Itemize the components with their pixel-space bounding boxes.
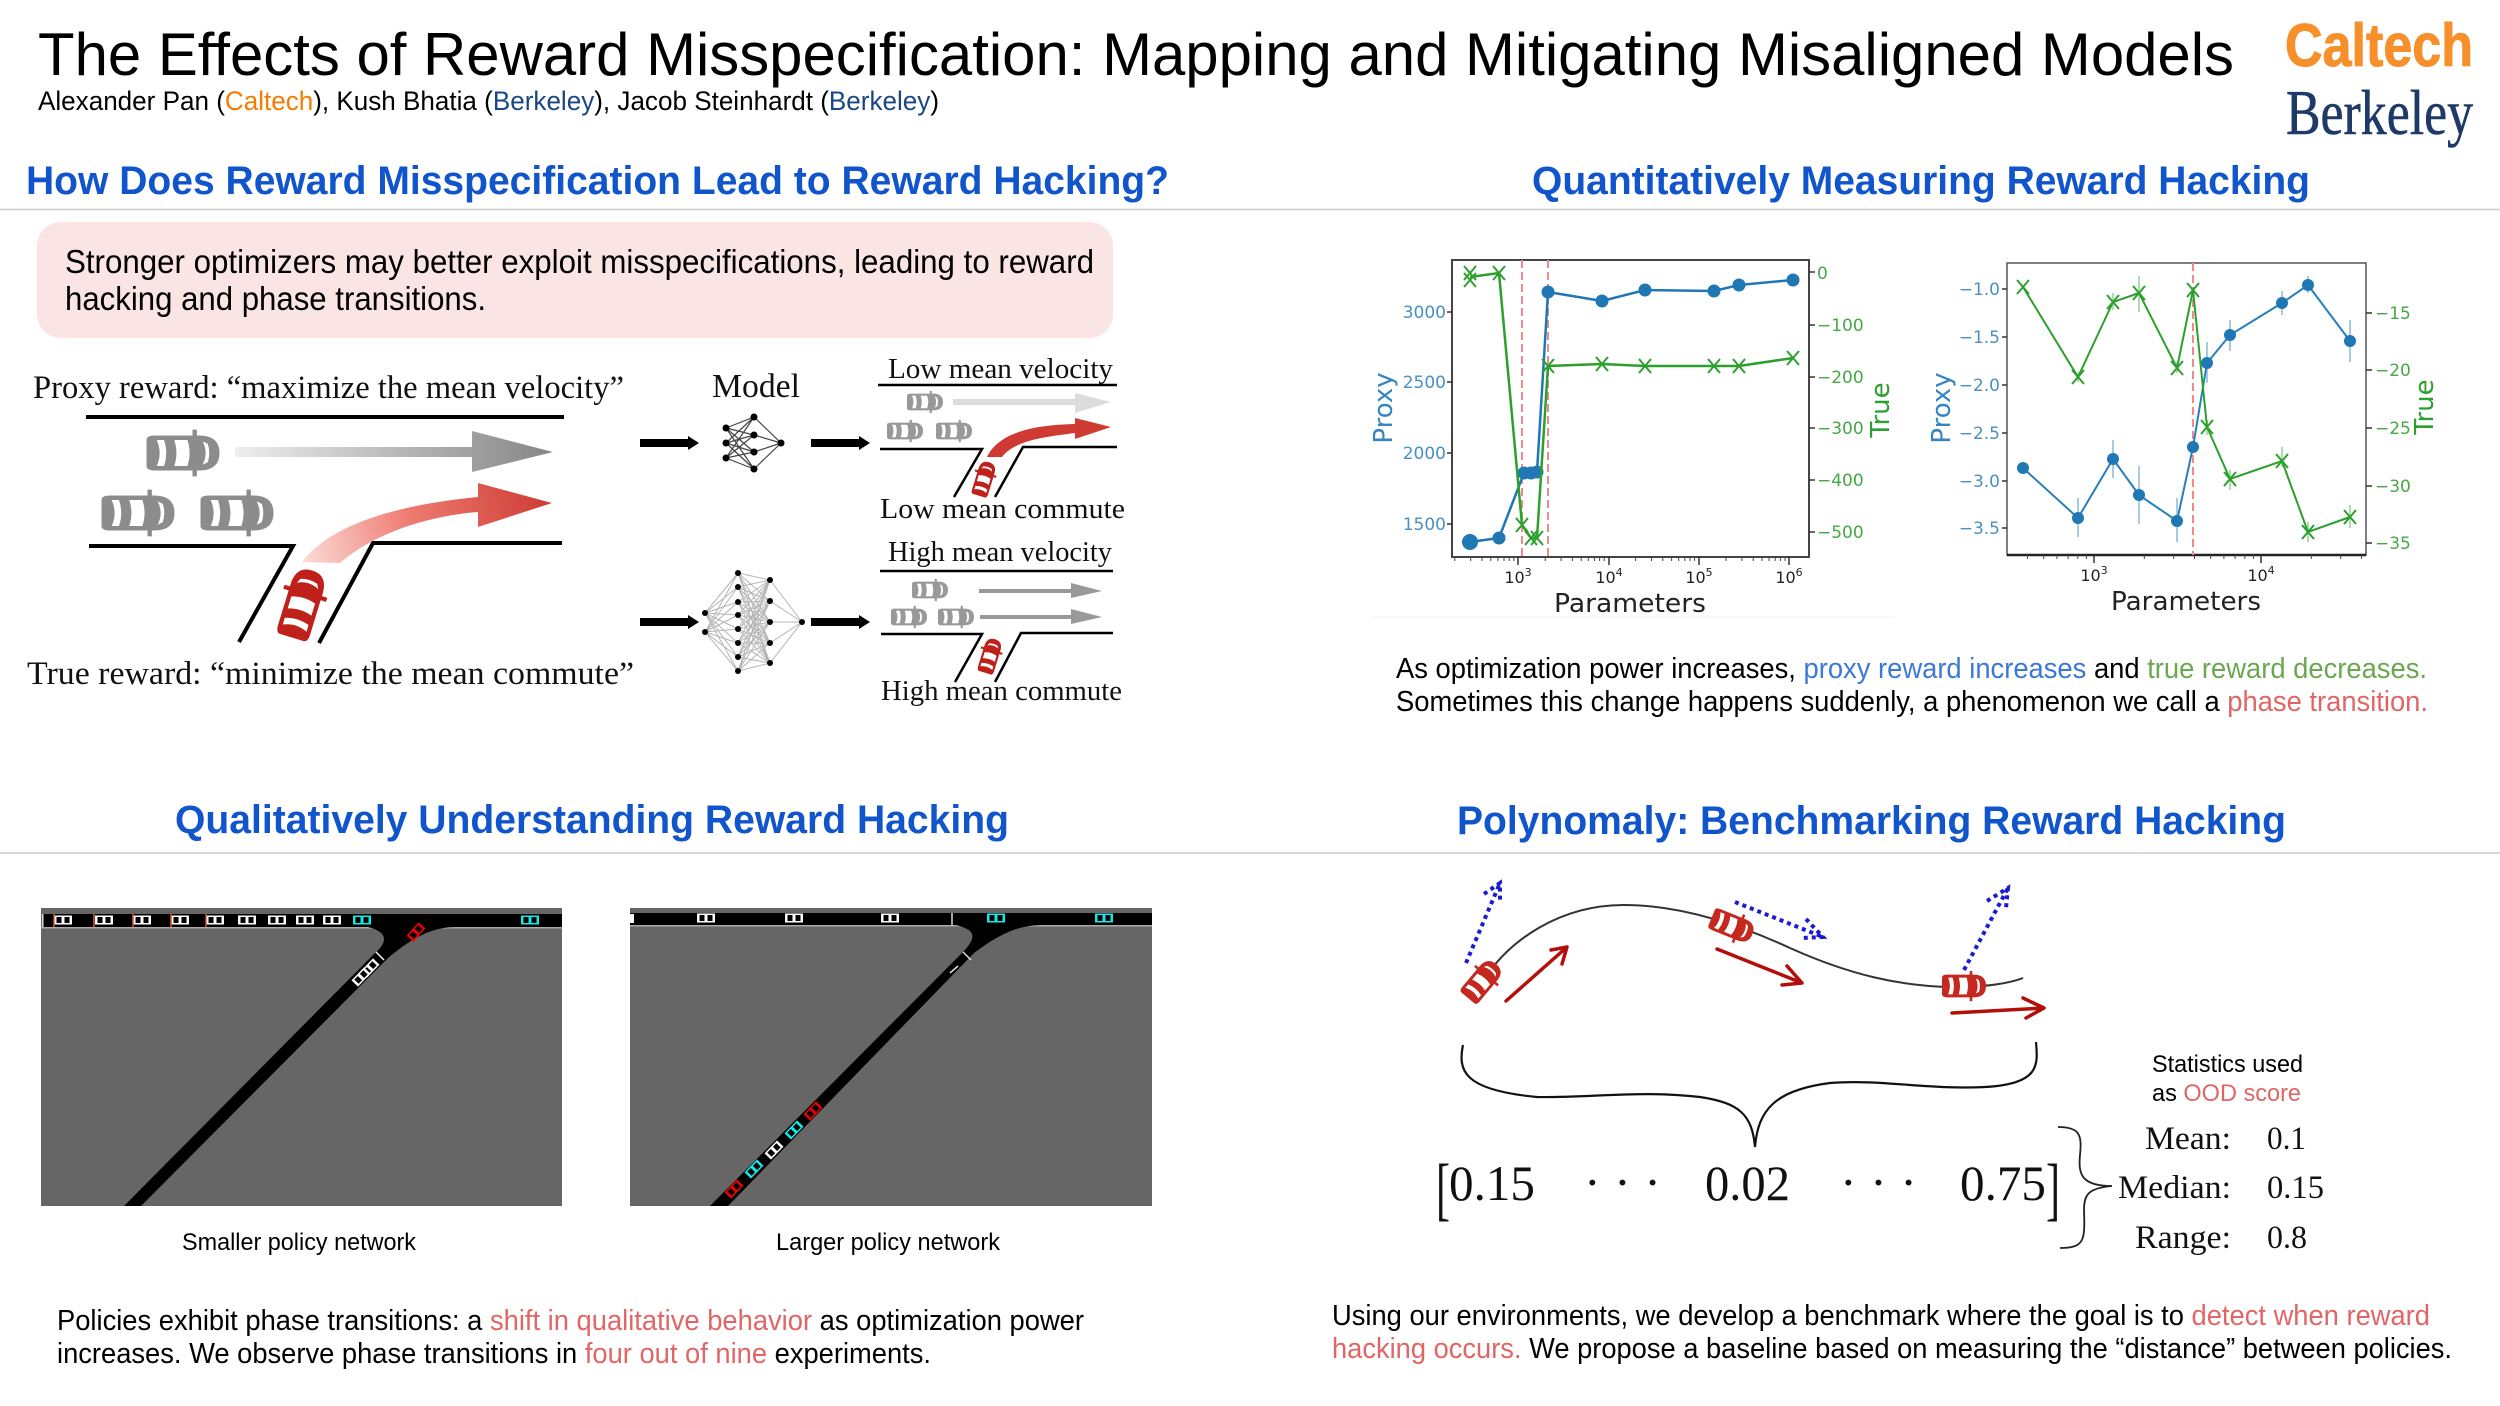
line chart: proxy vs true, left: 3 — [1525, 566, 1532, 579]
line chart: proxy vs true, left: True — [1866, 382, 1896, 439]
line chart: proxy vs true, left: 4 — [1616, 566, 1623, 579]
logo: Caltech: Caltech — [2285, 12, 2473, 79]
callout: hacking and phase transitions. — [65, 280, 486, 317]
line chart: proxy vs true, right: −20 — [2375, 361, 2411, 381]
text block: phase transitions — [57, 1305, 1084, 1370]
text block: benchmark description: hacking occurs. We propose a baseline based on measuring the “distance” between policies. — [1332, 1333, 2452, 1365]
line chart: proxy vs true, right: −15 — [2375, 304, 2411, 324]
line chart: proxy vs true, left: 2500 — [1403, 373, 1446, 393]
arrow — [811, 615, 870, 629]
line chart: proxy vs true, left: 3000 — [1403, 303, 1446, 323]
caption: Smaller policy network — [182, 1229, 417, 1256]
line chart: proxy vs true, right: −25 — [2375, 419, 2411, 439]
statistics table: Median: — [2118, 1170, 2231, 1206]
panel: qualitatively understanding reward hacking — [41, 798, 1152, 1370]
line chart: proxy vs true, left: −400 — [1817, 471, 1864, 491]
outcome: low velocity, low commute — [878, 353, 1125, 525]
panel: quantitatively measuring reward hacking — [1369, 159, 2440, 718]
line chart: proxy vs true, left: 5 — [1706, 566, 1713, 579]
diagram: proxy and true reward road: True reward: “minimize the mean commute” — [27, 656, 634, 692]
line chart: proxy vs true, right: −1.0 — [1959, 280, 2000, 300]
line chart: proxy vs true, right: −2.0 — [1959, 376, 2000, 396]
text block: benchmark description — [1332, 1300, 2452, 1365]
authors: Alexander Pan (Caltech), Kush Bhatia (Berkeley), Jacob Steinhardt (Berkeley) — [38, 86, 939, 116]
line chart: proxy vs true, left: −200 — [1817, 368, 1864, 388]
simulation: larger policy network — [630, 908, 1152, 1206]
line chart: proxy vs true, left: 10 — [1685, 568, 1706, 587]
line chart: proxy vs true, left: 10 — [1595, 568, 1616, 587]
vector of distances: [ — [1436, 1151, 1450, 1228]
vector of distances — [1436, 1151, 2060, 1228]
line chart: proxy vs true, left: 10 — [1775, 568, 1796, 587]
vector of distances: ··· — [1584, 1154, 1674, 1210]
title: The Effects of Reward Misspecification: Mapping and Mitigating Misaligned Models — [38, 21, 2234, 88]
line chart: proxy vs true, left — [1369, 260, 1896, 619]
statistics table: Range: — [2135, 1220, 2231, 1256]
diagram: trajectory with cars and arrows — [1456, 883, 2044, 1018]
arrow — [640, 615, 699, 629]
text block: phase transitions: Policies exhibit phase transitions: a shift in qualitative behavior as optimization power — [57, 1305, 1084, 1337]
brace — [1462, 1042, 2037, 1147]
statistics note: Statistics used — [2152, 1051, 2303, 1078]
callout — [37, 222, 1113, 338]
line chart: proxy vs true, left: Proxy — [1369, 372, 1399, 444]
callout: Stronger optimizers may better exploit misspecifications, leading to reward — [65, 243, 1094, 280]
line chart: proxy vs true, left: −100 — [1817, 316, 1864, 336]
line chart: proxy vs true, right: Proxy — [1927, 372, 1957, 444]
brace — [2058, 1127, 2112, 1248]
line chart: proxy vs true, right: 3 — [2101, 564, 2108, 577]
outcome: low velocity, low commute: Low mean velocity — [888, 353, 1113, 385]
statistics note — [2152, 1051, 2303, 1107]
panel: how misspecification leads to reward hacking — [26, 159, 1169, 707]
line chart: proxy vs true, left: 6 — [1796, 566, 1803, 579]
text block: benchmark description: Using our environments, we develop a benchmark where the goal is to detect when reward — [1332, 1300, 2430, 1332]
diagram: proxy and true reward road: Proxy reward: “maximize the mean velocity” — [33, 370, 624, 406]
line chart: proxy vs true, right: −35 — [2375, 534, 2411, 554]
line chart: proxy vs true, right: −1.5 — [1959, 328, 2000, 348]
line chart: proxy vs true, right: −3.0 — [1959, 472, 2000, 492]
arrow — [811, 436, 870, 450]
vector of distances: 0.15 — [1449, 1155, 1535, 1211]
heading: Qualitatively Understanding Reward Hacking — [175, 798, 1009, 842]
statistics table: 0.15 — [2267, 1170, 2324, 1206]
line chart: proxy vs true, left: 10 — [1504, 568, 1525, 587]
line chart: proxy vs true, right: −30 — [2375, 477, 2411, 497]
line chart: proxy vs true, left: −300 — [1817, 419, 1864, 439]
panel: polynomaly benchmark — [1332, 799, 2452, 1365]
diagram: proxy and true reward road — [27, 370, 634, 692]
outcome: high velocity, high commute: High mean commute — [881, 675, 1122, 707]
icon: large neural network — [702, 570, 805, 674]
heading: How Does Reward Misspecification Lead to Reward Hacking? — [26, 159, 1169, 203]
text block: explanation — [1396, 653, 2428, 718]
statistics table — [2118, 1121, 2324, 1256]
line chart: proxy vs true, left: Parameters — [1554, 589, 1706, 619]
line chart: proxy vs true, left: 1500 — [1403, 515, 1446, 535]
outcome: high velocity, high commute — [880, 536, 1122, 707]
line chart: proxy vs true, right — [1927, 263, 2440, 617]
text block: explanation: As optimization power increases, proxy reward increases and true reward decreases. — [1396, 653, 2427, 685]
text block: phase transitions: increases. We observe phase transitions in four out of nine experiments. — [57, 1338, 931, 1370]
line chart: proxy vs true, right: −3.5 — [1959, 519, 2000, 539]
statistics table: Mean: — [2145, 1121, 2231, 1157]
heading: model: Model — [712, 368, 800, 405]
heading: Quantitatively Measuring Reward Hacking — [1532, 159, 2310, 203]
icon: small neural network — [722, 414, 784, 472]
line chart: proxy vs true, left: 0 — [1817, 264, 1828, 284]
text block: explanation: Sometimes this change happens suddenly, a phenomenon we call a phase transition. — [1396, 686, 2428, 718]
vector of distances: 0.02 — [1705, 1155, 1790, 1211]
line chart: proxy vs true, right: Parameters — [2111, 587, 2261, 617]
arrow — [640, 436, 699, 450]
statistics table: 0.8 — [2267, 1220, 2307, 1256]
outcome: high velocity, high commute: High mean velocity — [888, 536, 1112, 568]
vector of distances: ··· — [1840, 1154, 1930, 1210]
heading: Polynomaly: Benchmarking Reward Hacking — [1457, 799, 2286, 843]
vector of distances: ] — [2046, 1151, 2060, 1228]
caption: Larger policy network — [776, 1229, 1001, 1256]
line chart: proxy vs true, right: 10 — [2080, 566, 2101, 585]
line chart: proxy vs true, right: True — [2410, 379, 2440, 436]
statistics note: as OOD score — [2152, 1080, 2301, 1107]
line chart: proxy vs true, right: 4 — [2268, 564, 2275, 577]
line chart: proxy vs true, right: 10 — [2247, 566, 2268, 585]
line chart: proxy vs true, left: 2000 — [1403, 444, 1446, 464]
line chart: proxy vs true, right: −2.5 — [1959, 424, 2000, 444]
statistics table: 0.1 — [2267, 1121, 2306, 1157]
outcome: low velocity, low commute: Low mean commute — [880, 493, 1125, 525]
simulation: smaller policy network — [41, 908, 562, 1206]
vector of distances: 0.75 — [1960, 1155, 2046, 1211]
line chart: proxy vs true, left: −500 — [1817, 523, 1864, 543]
